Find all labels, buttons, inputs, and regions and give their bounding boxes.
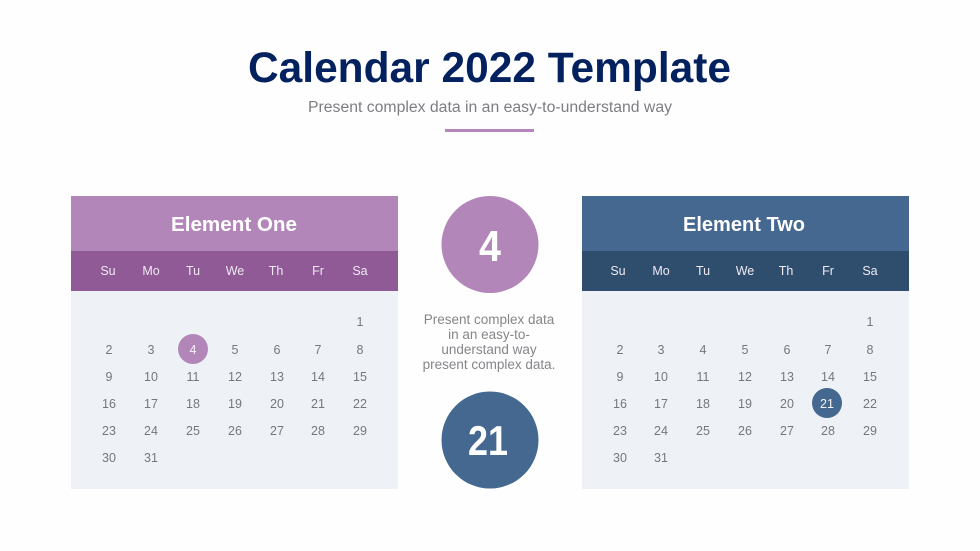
- date grid: Element One: 19: [228, 397, 242, 411]
- date grid: Element One: 1: [357, 315, 364, 329]
- date grid: Element Two: 28: [821, 424, 835, 438]
- highlighted date: 21: 21: [820, 397, 834, 411]
- date grid: Element One: 26: [228, 424, 242, 438]
- date grid: Element Two: 27: [780, 424, 794, 438]
- center description text: in an easy-to-: [448, 327, 530, 342]
- highlighted date: 4: 4: [190, 343, 197, 357]
- date grid: Element Two: 23: [613, 424, 627, 438]
- date grid: Element Two: 14: [821, 370, 835, 384]
- date grid: Element One: 20: [270, 397, 284, 411]
- badge: number 21: [442, 392, 538, 488]
- date grid: Element One: 27: [270, 424, 284, 438]
- date grid: Element One: 12: [228, 370, 242, 384]
- panel: Element One calendar: [71, 196, 398, 489]
- date grid: Element One: 22: [353, 397, 367, 411]
- date grid: Element One: 3: [148, 343, 155, 357]
- badge: number 4: [442, 196, 538, 293]
- date grid: Element Two: 18: [696, 397, 710, 411]
- weekday row: Element One: Tu: [186, 264, 200, 278]
- date grid: Element One: 31: [144, 451, 158, 465]
- weekday row: Element Two: Th: [779, 264, 793, 278]
- center description text: present complex data.: [423, 357, 555, 372]
- date grid: Element One: 25: [186, 424, 200, 438]
- panel header: Element One: Element One: [171, 214, 297, 236]
- date grid: Element Two: 4: [700, 343, 707, 357]
- date grid: Element One: 17: [144, 397, 158, 411]
- date grid: Element Two: 8: [867, 343, 874, 357]
- weekday row: Element Two: Sa: [862, 264, 878, 278]
- date grid: Element One: 6: [274, 343, 281, 357]
- date grid: Element One: 16: [102, 397, 116, 411]
- date grid: Element Two: 12: [738, 370, 752, 384]
- weekday row: Element Two: Mo: [652, 264, 670, 278]
- date grid: Element Two: 31: [654, 451, 668, 465]
- date grid: Element Two: 1: [867, 315, 874, 329]
- date grid: Element Two: 30: [613, 451, 627, 465]
- highlighted date: 4: [178, 334, 208, 364]
- weekday row: Element One: Mo: [142, 264, 160, 278]
- badge: number 4: 4: [479, 222, 501, 271]
- title underline: [445, 129, 534, 132]
- date grid: Element One: 18: [186, 397, 200, 411]
- weekday row: Element One: We: [226, 264, 244, 278]
- date grid: Element One: 8: [357, 343, 364, 357]
- date grid: Element Two: 26: [738, 424, 752, 438]
- date grid: Element Two: 17: [654, 397, 668, 411]
- weekday row: Element One: [71, 251, 398, 291]
- date grid: Element Two: 20: [780, 397, 794, 411]
- date grid: Element Two: 3: [658, 343, 665, 357]
- highlighted date: 21: [812, 388, 842, 418]
- date grid: Element Two: 29: [863, 424, 877, 438]
- date grid: Element Two: 6: [784, 343, 791, 357]
- weekday row: Element Two: Su: [610, 264, 626, 278]
- date grid: Element One: 14: [311, 370, 325, 384]
- weekday row: Element One: Th: [269, 264, 283, 278]
- date grid: Element Two: 10: [654, 370, 668, 384]
- weekday row: Element Two: Fr: [822, 264, 834, 278]
- center description text: understand way: [441, 342, 537, 357]
- center description text: [423, 312, 555, 372]
- weekday row: Element One: Su: [100, 264, 116, 278]
- date grid: Element Two: 11: [697, 370, 710, 384]
- date grid: Element One: [71, 291, 398, 489]
- date grid: Element One: 9: [106, 370, 113, 384]
- date grid: Element One: 28: [311, 424, 325, 438]
- date grid: Element One: 13: [270, 370, 284, 384]
- title: Calendar 2022 Template: [248, 44, 731, 92]
- date grid: Element Two: 22: [863, 397, 877, 411]
- date grid: Element One: 10: [144, 370, 158, 384]
- panel: Element Two calendar: [582, 196, 909, 489]
- date grid: Element One: 7: [315, 343, 322, 357]
- center description text: Present complex data: [424, 312, 555, 327]
- date grid: Element One: 15: [353, 370, 367, 384]
- date grid: Element Two: 9: [617, 370, 624, 384]
- date grid: Element One: 21: [311, 397, 325, 411]
- panel header: Element Two: [582, 196, 909, 251]
- date grid: Element Two: 2: [617, 343, 624, 357]
- weekday row: Element One: Sa: [352, 264, 368, 278]
- date grid: Element Two: [582, 291, 909, 489]
- date grid: Element Two: 16: [613, 397, 627, 411]
- weekday row: Element Two: We: [736, 264, 754, 278]
- weekday row: Element Two: Tu: [696, 264, 710, 278]
- date grid: Element One: 24: [144, 424, 158, 438]
- date grid: Element One: 11: [187, 370, 200, 384]
- date grid: Element One: 23: [102, 424, 116, 438]
- subtitle: Present complex data in an easy-to-understand way: [308, 99, 672, 116]
- date grid: Element Two: 7: [825, 343, 832, 357]
- panel header: Element Two: Element Two: [683, 214, 805, 236]
- date grid: Element One: 2: [106, 343, 113, 357]
- date grid: Element Two: 19: [738, 397, 752, 411]
- date grid: Element Two: 5: [742, 343, 749, 357]
- date grid: Element One: 5: [232, 343, 239, 357]
- date grid: Element Two: 24: [654, 424, 668, 438]
- date grid: Element Two: 25: [696, 424, 710, 438]
- weekday row: Element One: Fr: [312, 264, 324, 278]
- date grid: Element Two: 15: [863, 370, 877, 384]
- date grid: Element Two: 13: [780, 370, 794, 384]
- panel header: Element One: [71, 196, 398, 251]
- date grid: Element One: 30: [102, 451, 116, 465]
- badge: number 21: 21: [468, 417, 508, 464]
- weekday row: Element Two: [582, 251, 909, 291]
- date grid: Element One: 29: [353, 424, 367, 438]
